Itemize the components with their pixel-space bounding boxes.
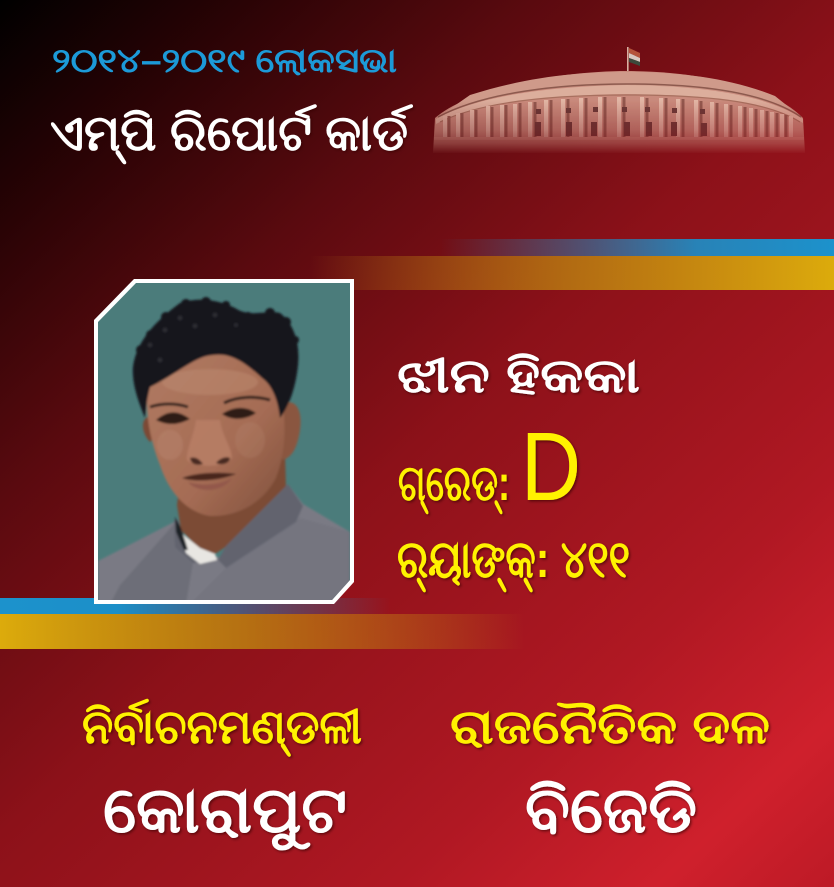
constituency value: କୋରାପୁଟ [103, 774, 347, 851]
heading: Lok Sabha term: ୨୦୧୪–୨୦୧୯ ଲୋକସଭା [52, 42, 397, 80]
eyes [156, 412, 190, 424]
bottom blue stripe [0, 598, 390, 614]
grade value: D [521, 412, 581, 521]
top gold stripe [310, 256, 834, 290]
party label: ରାଜନୈତିକ ଦଳ [450, 701, 770, 754]
illustration: parliament building [433, 47, 805, 153]
hair [133, 300, 298, 418]
grade label: ଗ୍ରେଡ୍: [398, 455, 510, 515]
nose [187, 420, 232, 466]
heading: MP report card: ଏମ୍‌ପି ରିପୋର୍ଟ କାର୍ଡ [50, 104, 414, 165]
eyebrows [150, 404, 188, 407]
forehead highlight [162, 369, 258, 395]
jacket collar [218, 484, 303, 568]
constituency label: ନିର୍ବାଚନମଣ୍ଡଳୀ [82, 699, 362, 757]
top blue stripe [440, 239, 834, 256]
ears [282, 402, 301, 460]
neck [177, 450, 286, 554]
shirt [180, 532, 217, 564]
portrait frame [94, 279, 356, 604]
shirt collar shadow [175, 517, 188, 550]
rank: ର୍‍ୟାଙ୍କ୍: ୪୧୧ [397, 531, 630, 592]
bottom gold stripe [0, 614, 525, 649]
party value: ବିଜେଡି [525, 774, 697, 846]
jacket [98, 493, 348, 600]
candidate name: ଝୀନ ହିକକା [397, 350, 640, 403]
face [147, 353, 284, 516]
mouth [182, 473, 236, 481]
